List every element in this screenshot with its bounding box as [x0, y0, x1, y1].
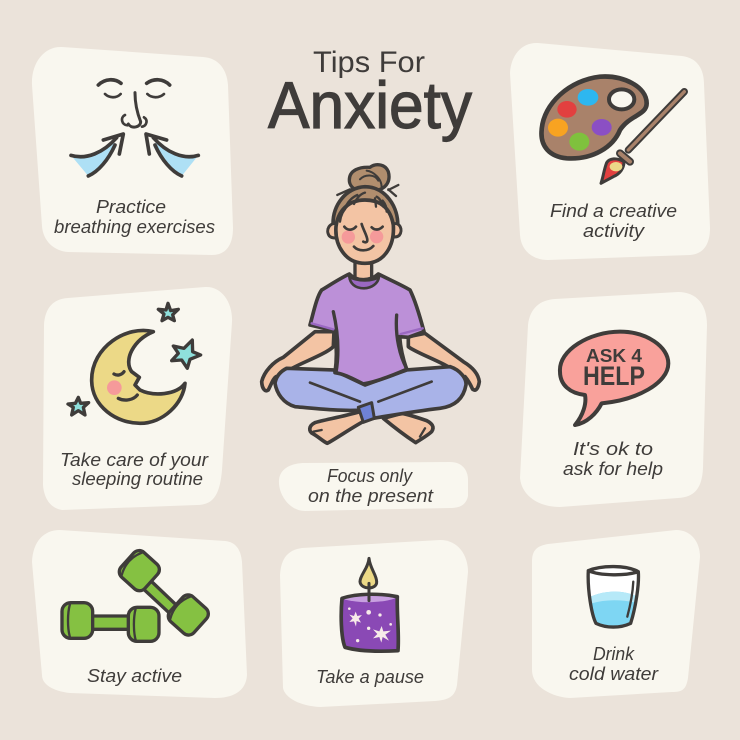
label: pause: Take a pause	[316, 667, 424, 687]
panel: ask for help	[520, 292, 707, 507]
label: focus: on the present	[308, 486, 434, 506]
panel: take a pause	[280, 540, 468, 707]
label: sleep	[60, 450, 209, 489]
ears	[328, 224, 401, 238]
panel: focus on the present	[279, 462, 468, 511]
label: sleep: Take care of your	[60, 450, 209, 470]
icon: glass of water	[588, 567, 638, 627]
label: breathing	[54, 197, 215, 237]
face	[336, 193, 393, 263]
label: help	[563, 439, 663, 479]
label: focus	[308, 466, 434, 506]
icon: face with breathing arrows	[71, 80, 198, 176]
label: help: It's ok to	[573, 439, 653, 459]
label: creative	[550, 201, 677, 241]
title: Anxiety	[268, 68, 472, 142]
label: focus: Focus only	[327, 466, 413, 486]
icon: candle	[341, 558, 398, 651]
label: active: Stay active	[87, 666, 182, 686]
label: breathing: Practice	[96, 197, 166, 217]
icon: dumbbells	[62, 548, 211, 641]
icon: moon and stars	[68, 303, 201, 423]
label: water	[569, 644, 659, 684]
icon: palette and brush	[541, 77, 684, 183]
title: Tips For	[313, 46, 425, 79]
label: water: cold water	[569, 664, 659, 684]
panel: sleeping routine	[43, 287, 232, 510]
hair and bun	[333, 165, 398, 228]
icon: speech bubble	[560, 332, 668, 425]
panel: drink cold water	[532, 530, 700, 698]
label: breathing: breathing exercises	[54, 217, 215, 237]
panel: creative activity	[510, 43, 710, 260]
neck	[355, 260, 372, 280]
panel: stay active	[32, 530, 247, 698]
label: creative: activity	[583, 221, 645, 241]
label: help: ask for help	[563, 459, 663, 479]
feet	[310, 412, 433, 443]
figure: meditating woman	[262, 165, 479, 443]
label: water: Drink	[593, 644, 635, 664]
label: creative: Find a creative	[550, 201, 677, 221]
icon: speech bubble: HELP	[583, 361, 645, 391]
label: sleep: sleeping routine	[72, 469, 203, 489]
legs	[275, 367, 466, 422]
icon: speech bubble: ASK 4	[586, 346, 642, 366]
arms	[262, 332, 479, 391]
t-shirt	[310, 274, 424, 384]
panel: breathing exercises	[32, 47, 233, 255]
